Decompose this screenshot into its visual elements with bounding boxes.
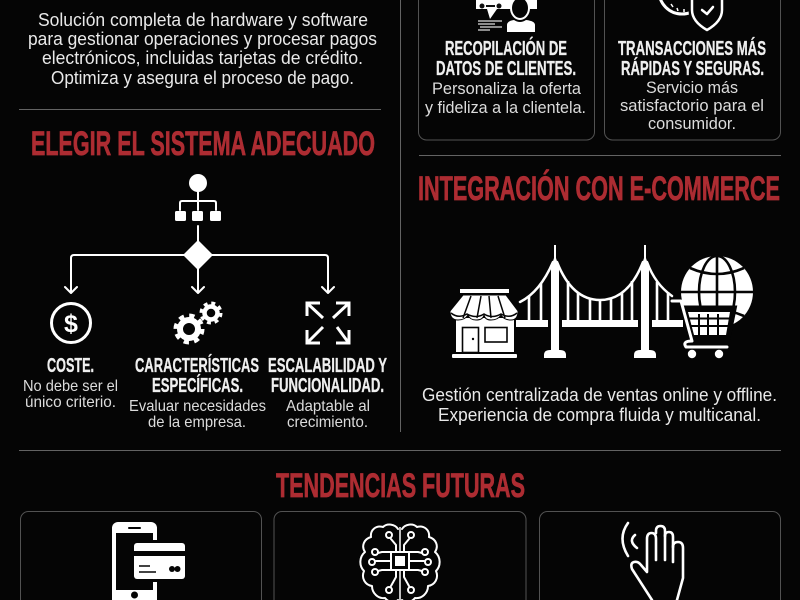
text: coste: No debe ser el: [23, 378, 118, 395]
text: recopilacion: RECOPILACIÓN DE: [445, 36, 567, 60]
panel: artificial intelligence: [274, 512, 526, 600]
heading: elegir el sistema adecuado: ELEGIR EL SISTEMA ADECUADO: [31, 125, 375, 163]
text: escalabilidad y funcionalidad: crecimiento.: [287, 414, 368, 431]
icon: waving hand: [622, 523, 683, 600]
text block: definition: Solución completa de hardware y software: [38, 10, 368, 30]
icon: customer data: [476, 0, 537, 32]
text: caracteristicas especificas: ESPECÍFICAS.: [152, 374, 243, 397]
icon: shopping cart: [672, 301, 733, 358]
icon: store bridge cart and globe: [450, 245, 753, 358]
text: escalabilidad y funcionalidad: ESCALABILIDAD Y: [268, 355, 387, 377]
icon: globe: [681, 256, 753, 328]
text: escalabilidad y funcionalidad: [268, 355, 387, 431]
text: escalabilidad y funcionalidad: FUNCIONALIDAD.: [271, 375, 384, 397]
panel: transacciones: [604, 0, 780, 140]
panel: elegir el sistema: [23, 174, 387, 431]
text block: e-commerce description: Experiencia de compra fluida y multicanal.: [438, 405, 761, 425]
text block: definition: [28, 10, 377, 88]
panel: mobile payments: [20, 512, 262, 600]
text block: e-commerce description: Gestión centralizada de ventas online y offline.: [422, 385, 777, 405]
text: recopilacion: [425, 36, 586, 117]
text: coste: único criterio.: [25, 394, 116, 411]
icon: dollar coin: [52, 304, 90, 342]
text: transacciones: Servicio más: [646, 78, 738, 97]
text block: e-commerce description: [422, 385, 777, 425]
text: recopilacion: y fideliza a la clientela.: [425, 98, 586, 117]
text block: definition: para gestionar operaciones y procesar pagos: [28, 29, 377, 49]
panel: recopilacion de datos: [418, 0, 594, 140]
text: recopilacion: DATOS DE CLIENTES.: [436, 58, 576, 80]
icon: dollar coin: $: [64, 310, 78, 338]
panel: contactless: [540, 512, 780, 600]
icon: store: [450, 289, 518, 358]
heading: tendencias futuras: TENDENCIAS FUTURAS: [276, 467, 525, 505]
text: transacciones: consumidor.: [648, 114, 736, 133]
text: caracteristicas especificas: de la empresa.: [148, 414, 246, 431]
icon: phone and card: [112, 522, 185, 600]
icon: bridge: [516, 245, 683, 358]
text: recopilacion: Personaliza la oferta: [432, 79, 582, 98]
icon: brain chip: [360, 525, 440, 600]
text block: definition: electrónicos, incluidas tarjetas de crédito.: [42, 48, 363, 68]
text: transacciones: satisfactorio para el: [620, 96, 764, 115]
text block: definition: Optimiza y asegura el proceso de pago.: [51, 68, 354, 88]
text: caracteristicas especificas: Evaluar necesidades: [129, 398, 266, 415]
text: coste: COSTE.: [47, 355, 94, 377]
icon: expand arrows: [307, 303, 349, 343]
text: caracteristicas especificas: [129, 354, 266, 431]
text: transacciones: [618, 37, 766, 133]
icon: decision flowchart: [65, 174, 334, 293]
icon: clock and shield: [659, 0, 722, 30]
text: escalabilidad y funcionalidad: Adaptable al: [286, 398, 370, 415]
icon: gears: [176, 303, 221, 342]
text: coste: [23, 355, 118, 411]
text: caracteristicas especificas: CARACTERÍSTICAS: [135, 354, 259, 377]
